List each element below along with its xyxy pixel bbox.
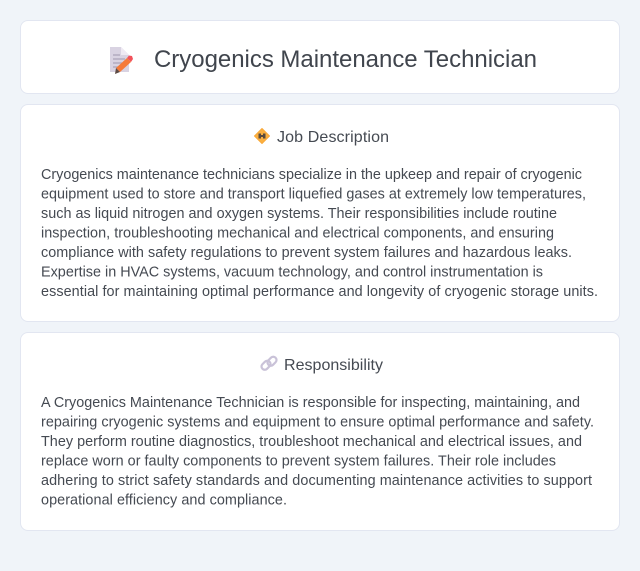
icon: chain link [260, 355, 278, 371]
title text: Cryogenics Maintenance Technician [154, 46, 537, 73]
heading: job description: Job Description [277, 129, 389, 146]
panel: responsibility [20, 332, 620, 531]
text block: job description: such as liquid nitrogen and oxygen systems. Their responsibilities include routine [41, 206, 557, 222]
text block: responsibility: A Cryogenics Maintenance Technician is responsible for inspecting, maintaining, and [41, 395, 580, 411]
text block: responsibility [41, 395, 594, 508]
text block: job description: compliance with safety regulations to prevent system failures and hazardous leaks. [41, 245, 572, 261]
text block: responsibility: adhering to strict safety standards and documenting maintenance activities to support [41, 473, 592, 489]
text block: job description: Expertise in HVAC systems, vacuum technology, and control instrumentation is [41, 264, 543, 280]
text block: job description: equipment used to store and transport liquefied gases at extremely low temperatures, [41, 186, 586, 202]
text block: job description [41, 167, 598, 300]
icon: document with pencil [110, 47, 133, 74]
text block: responsibility: They perform routine diagnostics, troubleshoot mechanical and electrical issues, and [41, 434, 582, 450]
text block: job description: inspection, troubleshooting mechanical and electrical components, and ensuring [41, 226, 554, 242]
panel: job description [20, 104, 620, 322]
text block: responsibility: repairing cryogenic systems and equipment to ensure optimal performance and safety. [41, 414, 594, 430]
text block: responsibility: replace worn or faulty components to prevent system failures. Their role includes [41, 454, 556, 470]
panel: title [20, 20, 620, 94]
icon: orange diamond sign [254, 128, 270, 144]
text block: responsibility: operational efficiency and compliance. [41, 492, 287, 508]
heading: responsibility: Responsibility [284, 357, 383, 374]
text block: job description: Cryogenics maintenance technicians specialize in the upkeep and repair of cryogenic [41, 167, 582, 183]
text block: job description: essential for maintaining optimal performance and longevity of cryogenic storage units. [41, 284, 598, 300]
